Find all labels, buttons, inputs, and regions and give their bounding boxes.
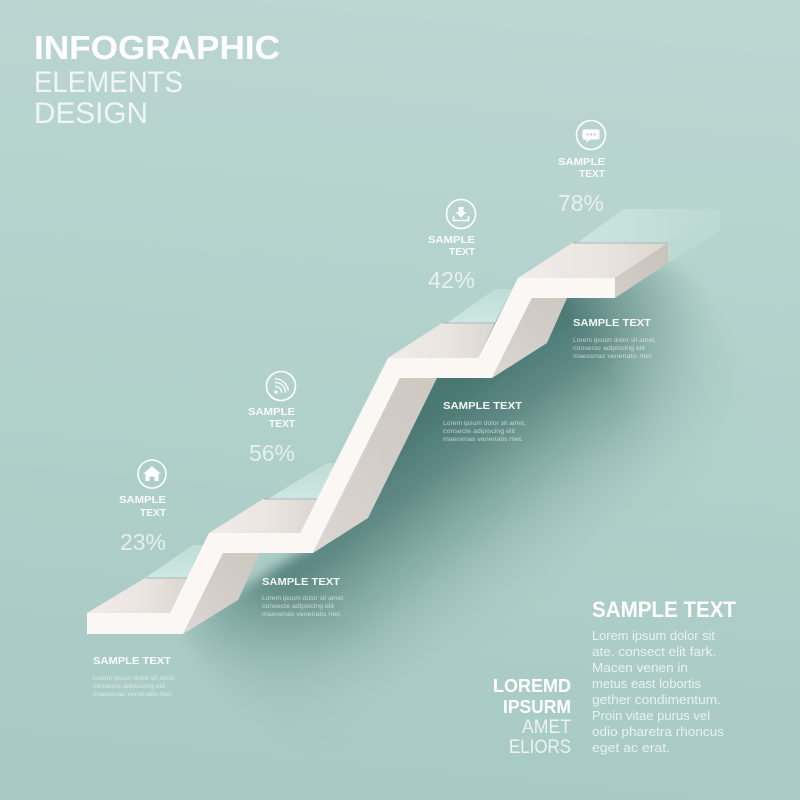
- riser shadow faces: [183, 298, 567, 634]
- caption 2: Lorem ipsum dolor sit amet,: [262, 595, 345, 602]
- value: 78%: [558, 190, 604, 216]
- white front ribbon: [87, 278, 615, 634]
- value: 23%: [120, 529, 166, 555]
- body text: eget ac erat.: [592, 740, 670, 755]
- label: [558, 156, 606, 180]
- body text: Macen venen in: [592, 660, 688, 675]
- caption 2: consecte adipiscing elit: [262, 603, 334, 610]
- lower-left heading block: AMET: [522, 717, 571, 738]
- caption 1: maecenas venenatis met.: [93, 691, 173, 698]
- icon: download: [446, 200, 476, 228]
- caption 2: [262, 576, 345, 618]
- caption 1: SAMPLE TEXT: [93, 655, 172, 667]
- body text: Proin vitae purus vel: [592, 708, 710, 723]
- label: [428, 234, 476, 258]
- title: INFOGRAPHIC: [34, 29, 280, 66]
- caption 3: Lorem ipsum dolor sit amet,: [443, 420, 526, 427]
- body text: Lorem ipsum dolor sit: [592, 628, 715, 643]
- label: TEXT: [269, 418, 296, 430]
- caption 4: consecte adipiscing elit: [573, 345, 645, 352]
- label: TEXT: [579, 168, 606, 180]
- body text: ate. consect elit fark.: [592, 644, 716, 659]
- caption 4: SAMPLE TEXT: [573, 317, 652, 329]
- caption 4: Lorem ipsum dolor sit amet,: [573, 337, 656, 344]
- end face of top step: [615, 243, 668, 298]
- step 3 ghost extension: [447, 289, 512, 323]
- lower-left heading block: LOREMD: [493, 676, 571, 696]
- item 4: 78%: [558, 120, 606, 216]
- heading: SAMPLE TEXT: [592, 597, 737, 622]
- label: SAMPLE: [248, 406, 295, 418]
- caption 3: consecte adipiscing elit: [443, 428, 515, 435]
- body text: [592, 628, 725, 755]
- icon: home: [138, 460, 166, 488]
- label: TEXT: [449, 246, 476, 258]
- label: SAMPLE: [119, 494, 166, 506]
- caption 3: SAMPLE TEXT: [443, 400, 523, 412]
- label: [119, 494, 167, 519]
- label: SAMPLE: [428, 234, 475, 246]
- step 1 ghost extension: [145, 545, 207, 578]
- staircase cast shadow: [186, 264, 710, 694]
- item 1: 23%: [119, 460, 167, 555]
- tread back edges: [146, 243, 668, 578]
- caption 2: SAMPLE TEXT: [262, 576, 341, 588]
- step 2 ghost extension: [268, 463, 338, 499]
- caption 2: maecenas venenatis met.: [262, 611, 342, 618]
- icon: chat bubble: [576, 120, 606, 150]
- lower-left heading block: ELIORS: [509, 737, 571, 758]
- lower-left heading block: [493, 676, 571, 758]
- caption 1: [93, 655, 176, 698]
- label: [248, 406, 296, 430]
- body text: gether condimentum.: [592, 692, 721, 707]
- lower-right text block: [592, 597, 737, 755]
- lower-left heading block: IPSURM: [503, 697, 571, 717]
- caption 4: maecenas venenatis met.: [573, 353, 653, 360]
- body text: metus east lobortis: [592, 676, 701, 691]
- body text: odio pharetra rhoncus: [592, 724, 725, 739]
- caption 3: [443, 400, 526, 443]
- caption 1: consecte adipiscing elit: [93, 683, 165, 690]
- item 2: 56%: [248, 372, 296, 466]
- value: 56%: [249, 440, 295, 466]
- staircase: [87, 209, 720, 634]
- step 4 ghost extension: [577, 209, 720, 263]
- icon: wifi: [266, 372, 296, 400]
- value: 42%: [428, 267, 475, 293]
- caption 1: Lorem ipsum dolor sit amet,: [93, 675, 176, 682]
- tread top faces: [87, 243, 668, 613]
- caption 4: [573, 317, 656, 360]
- label: TEXT: [140, 507, 167, 519]
- label: SAMPLE: [558, 156, 605, 168]
- item 3: 42%: [428, 200, 476, 293]
- title: ELEMENTS: [34, 66, 183, 99]
- title: [34, 29, 280, 130]
- title: DESIGN: [34, 97, 148, 130]
- caption 3: maecenas venenatis met.: [443, 436, 523, 443]
